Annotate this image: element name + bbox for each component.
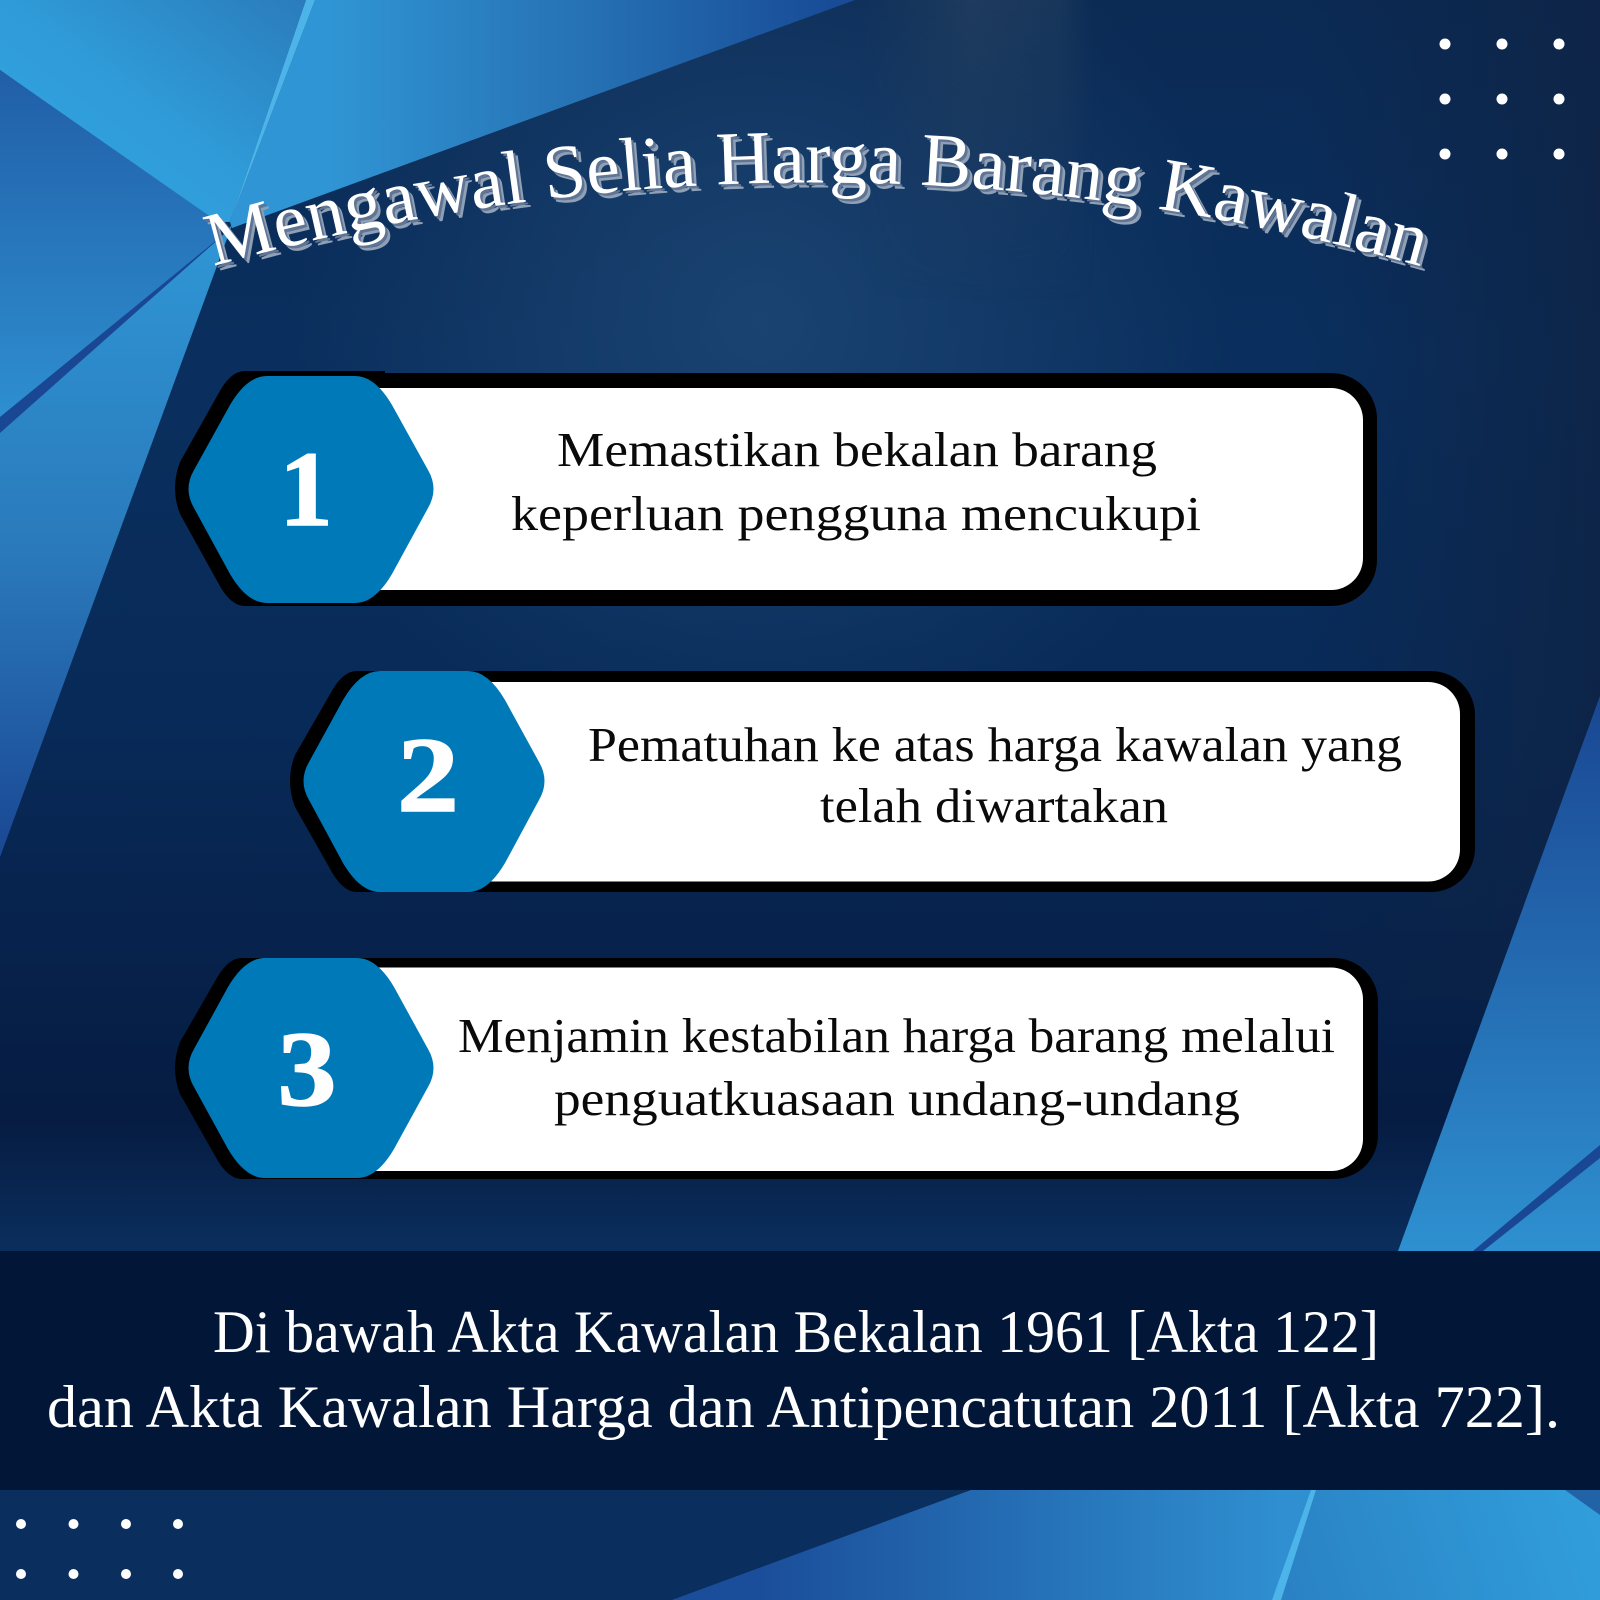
card 3 text: Menjamin kestabilan harga barang melalui [458, 1008, 1335, 1063]
number 1: 1 [279, 431, 333, 549]
card 1 text: keperluan pengguna mencukupi [511, 486, 1201, 541]
footer text: Di bawah Akta Kawalan Bekalan 1961 [Akta 122] [213, 1299, 1379, 1365]
number 2: 2 [397, 717, 459, 835]
hexagon 1 [188, 376, 434, 603]
number 3: 3 [278, 1011, 336, 1129]
card 2 [290, 671, 1475, 892]
card 1 text [511, 422, 1201, 541]
hexagon 2 [304, 671, 544, 892]
footer text: dan Akta Kawalan Harga dan Antipencatutan 2011 [Akta 722]. [47, 1374, 1560, 1440]
card 3 [175, 958, 1378, 1179]
footer band [0, 1251, 1600, 1490]
card 3 text: penguatkuasaan undang-undang [554, 1071, 1240, 1126]
top-left geometric shapes [0, 0, 855, 857]
footer text [47, 1299, 1560, 1440]
dots: top right [1440, 38, 1564, 160]
title: Mengawal Selia Harga Barang Kawalan [202, 133, 1423, 266]
bottom-right geometric shapes [672, 696, 1600, 1600]
card 1 text: Memastikan bekalan barang [557, 422, 1157, 477]
card 3 text [458, 1008, 1335, 1126]
title: Mengawal Selia Harga Barang Kawalan [205, 136, 1426, 268]
card 2 text: telah diwartakan [820, 778, 1168, 833]
hexagon 3 [188, 958, 434, 1178]
card 2 text: Pematuhan ke atas harga kawalan yang [588, 717, 1402, 772]
dots: bottom left [16, 1519, 183, 1579]
card 1 [175, 371, 1377, 606]
card 2 text [588, 717, 1402, 833]
title: Mengawal Selia Harga Barang Kawalan [208, 138, 1428, 271]
